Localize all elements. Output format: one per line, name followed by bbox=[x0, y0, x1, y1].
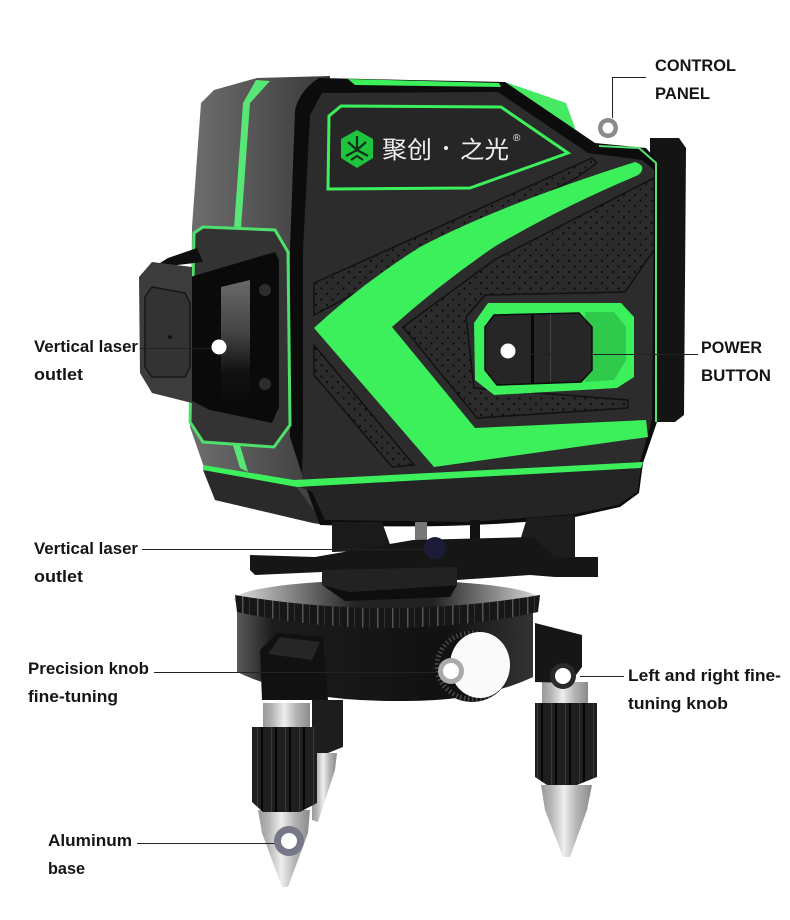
bottom green band bbox=[203, 462, 643, 487]
left foot housing bbox=[260, 633, 328, 700]
left side housing bbox=[190, 76, 330, 525]
brand name: 聚创 bbox=[382, 137, 432, 164]
centre post bbox=[415, 522, 427, 570]
lug black frame bbox=[190, 252, 279, 423]
right foot bbox=[535, 682, 597, 857]
logo panel bbox=[328, 106, 568, 189]
callout: left and right knob: tuning knob bbox=[628, 694, 728, 713]
right foot grip bbox=[535, 703, 597, 785]
left side green stripe lower bbox=[232, 442, 248, 472]
callout: aluminum base bbox=[48, 826, 304, 878]
brand name second part: 之光 bbox=[460, 137, 509, 164]
callout: left and right knob: Left and right fine- bbox=[628, 666, 781, 685]
logo plate bbox=[328, 106, 568, 189]
lug top screw bbox=[259, 284, 271, 296]
rear control box bbox=[588, 138, 686, 422]
callout: precision knob: Precision knob bbox=[28, 659, 149, 678]
bracket right block bbox=[515, 515, 575, 557]
callout: control panel: PANEL bbox=[655, 84, 710, 103]
main body front bbox=[290, 78, 659, 526]
callout: power button bbox=[500, 338, 771, 385]
plate rear bbox=[250, 537, 598, 580]
right dotted region bbox=[403, 178, 654, 418]
front foot screw bbox=[263, 703, 310, 728]
switch recess bbox=[585, 312, 626, 382]
callout: control panel bbox=[598, 56, 736, 138]
switch divider bbox=[531, 315, 534, 384]
knob dome bbox=[450, 632, 510, 698]
left side green stripe upper bbox=[234, 80, 270, 228]
green edge at right corner bbox=[599, 146, 656, 422]
lug window bbox=[221, 280, 250, 412]
callout: aluminum base: base bbox=[48, 859, 85, 878]
callout: precision knob: fine-tuning bbox=[28, 687, 118, 706]
back foot grip bbox=[312, 700, 343, 753]
right foot screw bbox=[542, 682, 588, 706]
callout: precision knob bbox=[28, 658, 464, 706]
lower body face bbox=[300, 468, 641, 522]
callout: vertical laser outlet upper: outlet bbox=[34, 365, 83, 384]
registered mark: ® bbox=[513, 133, 521, 144]
back foot tip bbox=[312, 753, 337, 822]
front foot bbox=[252, 703, 317, 887]
main body front face bbox=[302, 92, 654, 484]
left side lower band bbox=[203, 470, 325, 525]
turntable disc bbox=[234, 580, 540, 620]
lower left dotted strip bbox=[314, 345, 414, 467]
callout: vertical laser outlet upper bbox=[34, 337, 226, 384]
callout: aluminum base: Aluminum bbox=[48, 831, 132, 850]
back foot bbox=[312, 700, 343, 822]
callout: power button: POWER bbox=[701, 338, 762, 357]
logo icon bbox=[341, 130, 373, 168]
knurled ring bbox=[235, 595, 540, 628]
turntable base bbox=[237, 610, 533, 701]
brand separator bbox=[444, 146, 448, 150]
switch green frame bbox=[474, 303, 634, 395]
knob ridges bbox=[437, 633, 507, 699]
callout: control panel: CONTROL bbox=[655, 56, 736, 75]
fine tuning knob bbox=[434, 630, 510, 702]
callout: power button: BUTTON bbox=[701, 366, 771, 385]
front foot tip bbox=[258, 810, 310, 887]
rear green wedge bbox=[505, 82, 575, 150]
callout: vertical laser outlet lower: Vertical laser bbox=[34, 539, 138, 558]
callout: vertical laser outlet lower bbox=[34, 539, 428, 586]
side lug bbox=[190, 227, 290, 447]
bracket left block bbox=[332, 522, 392, 552]
laser box top shadow bbox=[152, 248, 203, 268]
switch button bbox=[485, 313, 592, 385]
top green stripe bbox=[348, 79, 501, 87]
green swoosh bbox=[314, 162, 648, 467]
laser window front box bbox=[139, 262, 192, 403]
knob knurled ring bbox=[434, 630, 510, 702]
callout: vertical laser outlet lower: outlet bbox=[34, 567, 83, 586]
front foot grip bbox=[252, 727, 317, 812]
upper dotted strip bbox=[314, 158, 597, 315]
rear post bbox=[470, 520, 480, 550]
laser level product illustration bbox=[139, 76, 686, 887]
laser box hole bbox=[168, 335, 172, 339]
right arm bbox=[535, 623, 582, 683]
callout: left and right knob bbox=[550, 663, 781, 713]
laser box inner panel bbox=[145, 287, 190, 377]
plate front bbox=[322, 567, 457, 592]
right foot tip bbox=[541, 785, 592, 857]
power switch bbox=[474, 303, 634, 395]
lug bottom screw bbox=[259, 378, 271, 390]
under-body laser bbox=[424, 537, 446, 559]
callout: vertical laser outlet upper: Vertical laser bbox=[34, 337, 138, 356]
switch seam bbox=[550, 314, 551, 382]
plate front shadow bbox=[322, 585, 457, 601]
left foot highlight bbox=[268, 637, 320, 660]
